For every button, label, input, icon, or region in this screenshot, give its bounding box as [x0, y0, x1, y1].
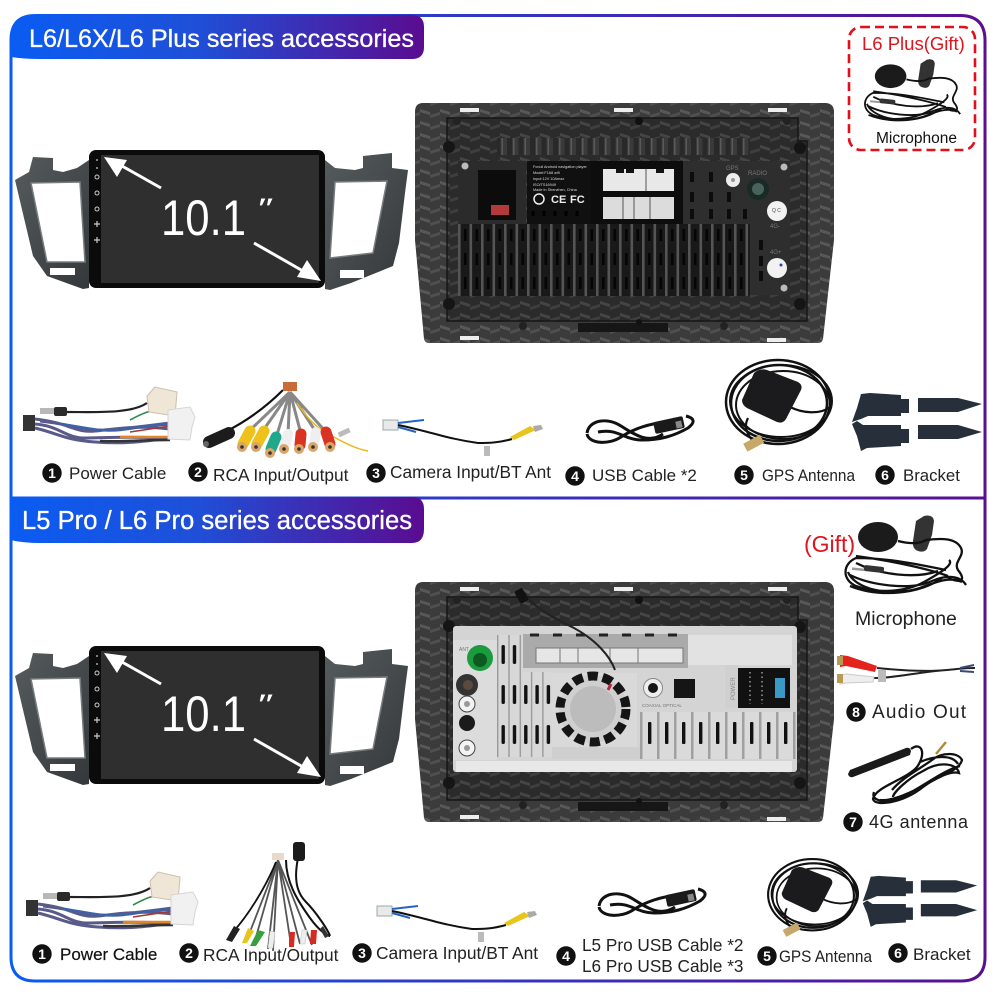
label: bracket: [875, 465, 960, 485]
ANT port column: ANT: [459, 647, 469, 653]
label: camera L5: 3: [358, 945, 366, 961]
accessory: RCA cable: [203, 382, 368, 458]
accessory: audio out cable: [837, 655, 975, 684]
head unit front: L6: ″: [256, 192, 273, 223]
head unit rear: L6: [415, 103, 834, 343]
label: GPS: GPS Antenna: [762, 466, 855, 485]
label: power cable L5: Power Cable: [60, 945, 157, 964]
power connector: POWER: [731, 677, 737, 700]
spec label: CE: [551, 194, 566, 206]
label: USB L5: L5 Pro USB Cable *2: [582, 935, 743, 955]
antenna sockets: 4G+: [770, 250, 782, 256]
accessory: camera cable: [383, 420, 543, 456]
silver chassis: [453, 626, 797, 772]
label: camera: 3: [372, 465, 380, 481]
label: microphone: Microphone: [855, 608, 957, 630]
ISO power connector: [458, 161, 526, 224]
accessory: power cable L5: [26, 872, 198, 928]
head unit front: L6: 10.1: [161, 190, 246, 246]
antenna sockets: 4G-: [770, 224, 780, 230]
power connector: [725, 665, 790, 708]
accessory: USB cable: [587, 416, 693, 442]
cooling fan: [552, 673, 637, 747]
accessory: RCA harness L5: [226, 842, 330, 951]
label: RCA L5: RCA Input/Output: [203, 945, 339, 965]
heat-sink fins: [458, 224, 750, 296]
antenna sockets: RADIO: [748, 171, 767, 177]
left fins: [497, 635, 523, 757]
heading: L5 Pro series: L5 Pro / L6 Pro series accessories: [22, 507, 412, 535]
accessory: bracket: [852, 393, 982, 451]
label: bracket L5: [888, 943, 971, 964]
label: bracket L5: Bracket: [913, 945, 971, 964]
antenna sockets: Q C: [772, 208, 781, 214]
accessory: 4G antenna: [848, 742, 962, 803]
spec label: FC: [570, 194, 585, 206]
text: gift: (Gift): [804, 531, 855, 557]
label: RCA: RCA Input/Output: [213, 465, 349, 485]
head unit front: L5 Pro: ″: [256, 688, 273, 719]
connector wire: [524, 592, 615, 670]
ANT port column: [453, 640, 497, 760]
label: 4G antenna: 4G antenna: [869, 812, 969, 832]
label: power cable: Power Cable: [69, 464, 166, 483]
antenna sockets: [683, 161, 790, 295]
label: USB L5: L6 Pro USB Cable *3: [582, 956, 743, 976]
vent strip: [497, 138, 750, 155]
label: GPS: [734, 465, 855, 485]
spec label: ISO/TS16949: [533, 183, 556, 187]
label: audio out: Audio Out: [872, 702, 967, 723]
coax and optical ports: [642, 678, 695, 708]
accessory: bracket L5: [863, 876, 977, 927]
label: 4G antenna: 7: [849, 814, 857, 830]
spec label: Model:F168 wifi: [533, 171, 560, 175]
accessory: USB cable L5: [599, 889, 705, 915]
callout: L6 Plus gift microphone: L6 Plus(Gift): [862, 33, 965, 54]
bottom vents: [552, 747, 640, 759]
spec label: Input:12V 10Amax: [533, 177, 564, 181]
heading: L6 series: L6/L6X/L6 Plus series accessories: [29, 25, 414, 53]
heading: L6 series: [11, 15, 424, 59]
label: bracket: 6: [881, 467, 889, 483]
label: RCA L5: 2: [185, 945, 193, 961]
label: USB: 4: [571, 468, 579, 484]
label: camera L5: Camera Input/BT Ant: [376, 943, 538, 963]
accessory: GPS antenna L5: [768, 859, 858, 937]
top connector bay: [523, 634, 688, 668]
accessory: power cable: [23, 387, 195, 443]
label: power cable: 1: [48, 465, 56, 481]
label: audio out: 8: [852, 704, 860, 720]
label: power cable L5: 1: [38, 946, 46, 962]
spec label: [527, 161, 591, 224]
lower fins: [640, 712, 796, 759]
label: RCA: 2: [194, 464, 202, 480]
gift microphone: [846, 516, 966, 593]
label: USB L5: [556, 935, 743, 976]
head unit front: L5 Pro: 10.1: [161, 686, 246, 742]
accessory: GPS antenna: [726, 360, 832, 452]
antenna sockets: GPS: [726, 166, 739, 172]
callout: L6 Plus gift microphone: [849, 27, 975, 150]
spec label: Fcnuli Android navigation player: [533, 165, 588, 169]
head unit rear: L5 Pro: [415, 582, 834, 822]
callout: L6 Plus gift microphone: Microphone: [876, 130, 957, 147]
heading: L5 Pro series: [10, 497, 424, 543]
white harness connectors: [591, 161, 683, 224]
spec label: Made in Shenzhen, China: [533, 188, 578, 192]
label: bracket: Bracket: [903, 466, 960, 485]
label: GPS: 5: [740, 467, 748, 483]
label: USB L5: 4: [562, 948, 570, 964]
label: USB: USB Cable *2: [592, 466, 697, 485]
coax and optical ports: COAXIAL OPTICAL: [642, 703, 682, 708]
head unit front: L6: [15, 150, 408, 290]
label: GPS L5: 5: [763, 948, 771, 964]
accessory: camera cable L5: [377, 906, 537, 942]
upper right fins: [688, 635, 792, 665]
label: GPS L5: GPS Antenna: [779, 947, 872, 966]
label: bracket L5: 6: [894, 945, 902, 961]
head unit front: L5 Pro: [15, 646, 408, 786]
label: camera: Camera Input/BT Ant: [390, 462, 551, 482]
